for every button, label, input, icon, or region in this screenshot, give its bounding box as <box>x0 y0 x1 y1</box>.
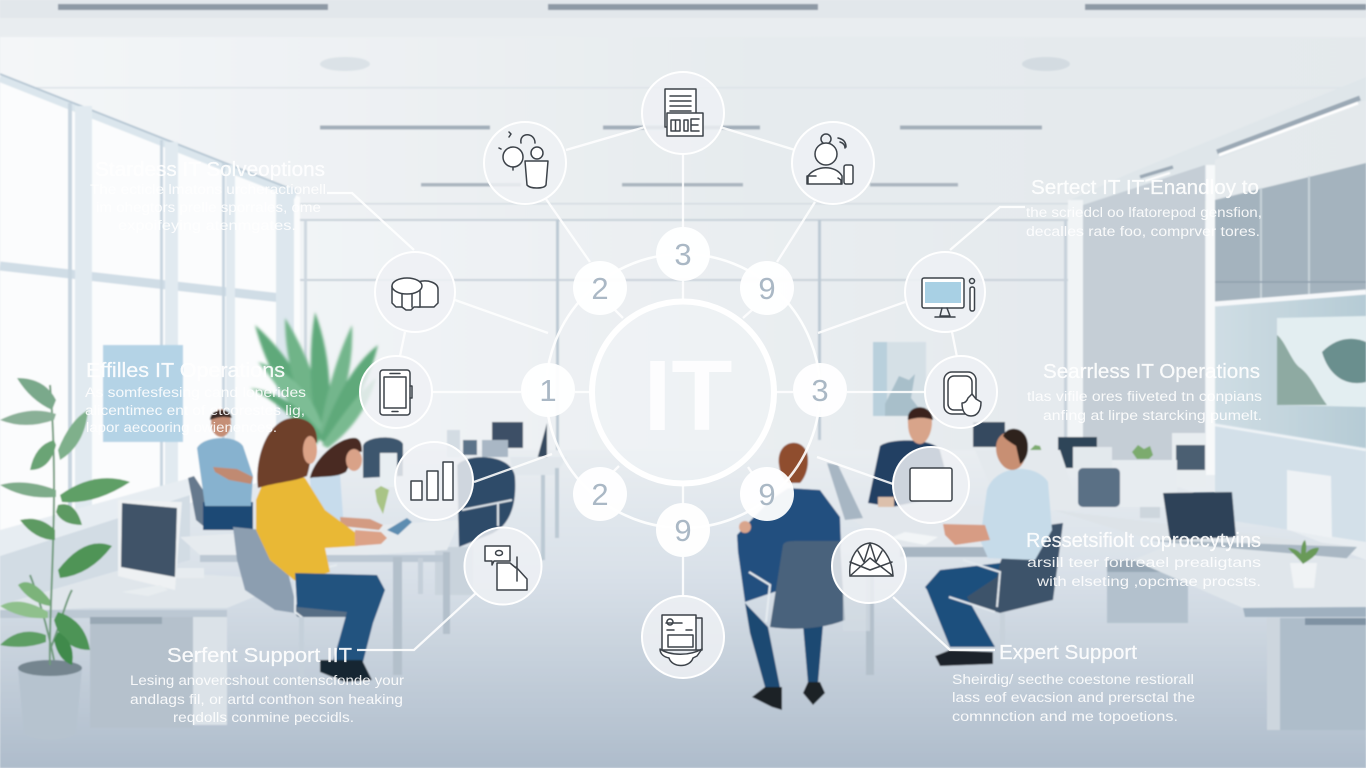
right foreground desks <box>1053 492 1366 730</box>
left foreground potted plant <box>0 378 130 740</box>
background desks and monitors <box>435 422 1332 595</box>
text block: Effilles IT Operations <box>85 360 306 435</box>
icon: open envelope <box>832 529 906 603</box>
text block: Expert Support: Sheirdig/ secthe coestone restiorall <box>952 672 1194 687</box>
text block: Resourceful: with elseting ,opcmae procsts. <box>1036 574 1261 589</box>
person: seated man in navy suit, seen from behind <box>737 443 845 710</box>
text block: Seamless IT Operations: anfing at lirpe starcking pumelt. <box>1043 408 1262 423</box>
central IT hub: IT <box>644 340 732 452</box>
node 1 left: 1 <box>539 373 557 408</box>
icon: chat and note <box>464 528 542 604</box>
connector lines <box>327 127 1025 650</box>
icon: blank screen <box>893 447 969 523</box>
text block: Effilles IT Operations: lapor aecooring owienences. <box>86 420 277 435</box>
outer ring <box>546 254 820 528</box>
node 3 top: 3 <box>674 237 692 272</box>
node 2 lower left <box>573 467 627 521</box>
desk pot plant <box>1288 540 1319 588</box>
central right desk <box>827 463 1000 675</box>
text block: Resourceful <box>1026 530 1261 589</box>
left window wall <box>0 74 300 610</box>
icon: smartphone <box>360 356 432 428</box>
text block: Serfent Support IT: Lesing anovercshout contenscfonde your <box>130 673 405 688</box>
text block: Effilles IT Operations: As somfesfesing cand loperides <box>85 385 306 400</box>
text block: Expert Support: Expert Support <box>999 642 1137 664</box>
text block: Seamless IT Operations: Searrless IT Operations <box>1043 361 1260 383</box>
text block: Expert Support <box>952 642 1195 724</box>
person: man in navy suit at the back <box>868 407 952 507</box>
node 2 upper left: 2 <box>591 271 609 306</box>
icon: bar chart <box>395 442 473 520</box>
text block: Serfent Support IT: Serfent Support IIT <box>167 645 352 667</box>
text block: Serfent Support IT: reqdolls conmine peccidls. <box>173 710 354 725</box>
right wall and glass panels <box>1068 77 1366 542</box>
text block: Stardess IT Solutions <box>90 159 326 233</box>
person: man in light blue shirt with chair <box>925 429 1063 666</box>
icon: database drums <box>375 252 455 332</box>
node 1 left <box>521 363 575 417</box>
node 9 upper right: 9 <box>758 271 776 306</box>
text block: Stardess IT Solutions: Stardess IT Solveoptions <box>95 159 325 181</box>
back wall <box>295 219 1085 460</box>
person: woman in yellow sweater with chair <box>233 418 387 682</box>
text block: Select IT Enandloy <box>1026 177 1262 239</box>
node 9 bottom <box>656 503 710 557</box>
node 9 bottom: 9 <box>674 513 692 548</box>
node 3 right: 3 <box>811 373 829 408</box>
text block: Resourceful: arsill teer fortreael prealigtans <box>1027 555 1261 570</box>
text block: Stardess IT Solutions: The ecticle lmatons urcheractionell <box>90 182 326 197</box>
person: woman in white shirt <box>310 438 383 530</box>
node 3 right <box>793 363 847 417</box>
text block: Select IT Enandloy: Sertect IT IT-Enandloy to <box>1031 177 1259 199</box>
ceiling <box>0 0 1366 222</box>
text block: Stardess IT Solutions: expoifeying atenmgates. <box>118 218 296 233</box>
node 2 lower left: 2 <box>591 477 609 512</box>
node 3 top <box>656 227 710 281</box>
node 9 lower right: 9 <box>758 477 776 512</box>
text block: Effilles IT Operations: Effilles IT Operations <box>86 360 285 382</box>
left front desk <box>0 500 295 728</box>
text block: Select IT Enandloy: the scriedcl oo lfatorepod gensfion, <box>1026 205 1262 220</box>
node 9 lower right <box>740 467 794 521</box>
text block: Select IT Enandloy: decalles rate foo, comprver tores. <box>1026 224 1260 239</box>
icon: document top <box>642 72 724 154</box>
front monitor <box>118 500 204 596</box>
text block: Effilles IT Operations: alicentimec ent of etcorestes lig, <box>85 403 305 418</box>
text block: Expert Support: comnnction and me topoetions. <box>952 709 1178 724</box>
node 2 upper left <box>573 261 627 315</box>
person: man in blue shirt <box>188 409 253 530</box>
left middle desk <box>180 518 460 675</box>
number nodes <box>521 227 847 557</box>
text block: Expert Support: lass eof evacsion and prersctal the <box>952 690 1195 705</box>
text block: Seamless IT Operations: tlas vifile ores fiiveted tn conpians <box>1027 389 1262 404</box>
text block: Serfent Support IT: andlags fil, or artd conthon son heaking <box>130 692 403 707</box>
text block: Stardess IT Solutions: im ohegtors prelle sporrales, ome <box>96 200 321 215</box>
icon: person at desk <box>792 122 874 204</box>
text block: Serfent Support IT <box>130 645 405 725</box>
node 9 upper right <box>740 261 794 315</box>
icon: tablet with hand <box>925 356 997 428</box>
floor <box>0 450 1366 768</box>
icon: person with bulb <box>484 122 566 204</box>
text block: Resourceful: Ressetsifiolt coproccytyins <box>1026 530 1261 552</box>
icon: certificate with ribbon <box>642 596 724 678</box>
background plant <box>250 312 378 448</box>
central IT hub <box>592 302 774 484</box>
icon: monitor <box>905 252 985 332</box>
navy office chairs <box>363 437 515 547</box>
text block: Seamless IT Operations <box>1027 361 1262 423</box>
